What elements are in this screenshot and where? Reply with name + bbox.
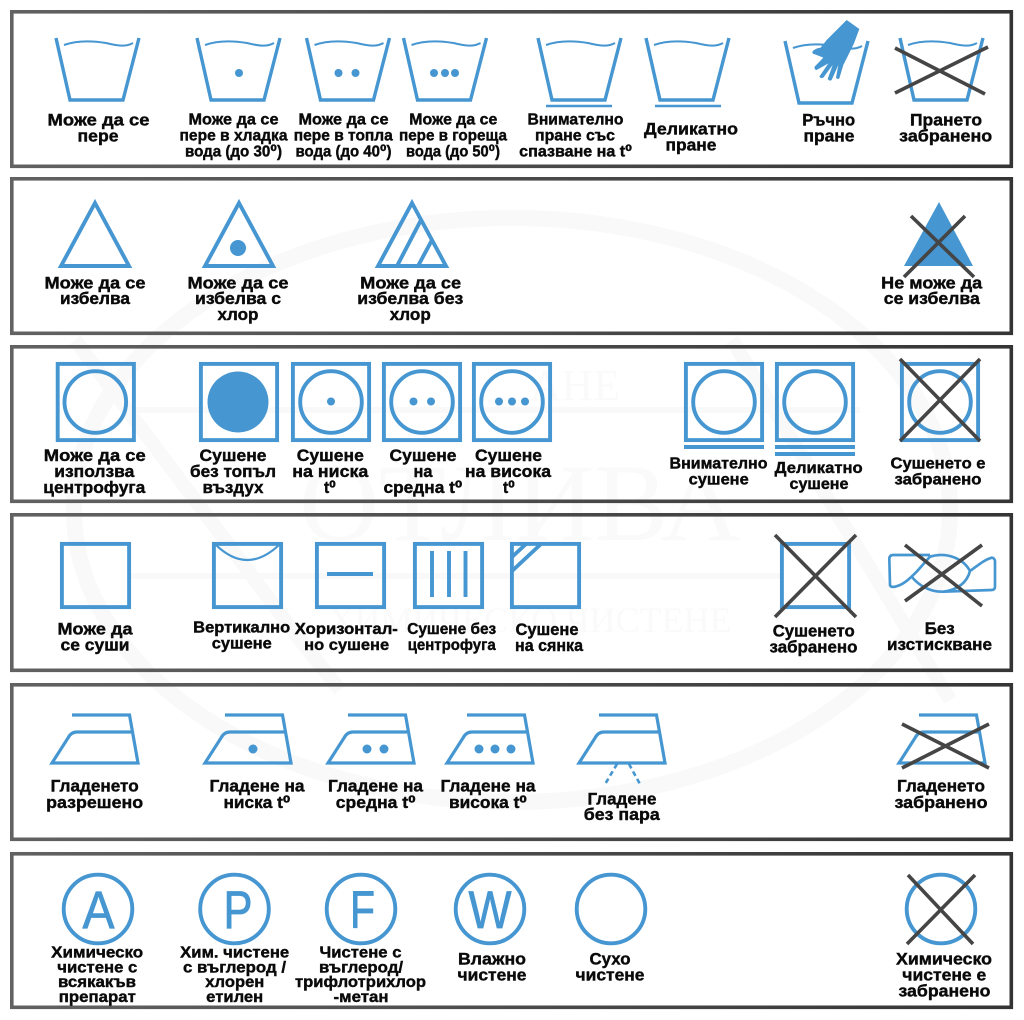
- label: [292, 446, 369, 497]
- label: чистене с: [57, 959, 137, 976]
- label: t⁰: [324, 478, 336, 497]
- label: [775, 460, 863, 493]
- item: wash cold: [180, 38, 288, 160]
- label: Сухо: [590, 949, 630, 968]
- icon: square, circle, one dot: [293, 364, 369, 440]
- label: Влажно: [458, 949, 526, 968]
- label: Може да се: [409, 111, 497, 128]
- label: висока t⁰: [449, 793, 527, 812]
- label: всякакъв: [58, 974, 136, 991]
- item: bleach with chlorine: [188, 203, 288, 324]
- icon: iron: [52, 715, 138, 763]
- label: [890, 455, 986, 488]
- label: [465, 446, 552, 497]
- icon: crossed twisted cloth: [889, 545, 995, 606]
- label: без топъл: [190, 462, 276, 481]
- item: line dry: [193, 544, 290, 652]
- label: [881, 273, 983, 308]
- item: ironing forbidden: [894, 715, 989, 812]
- icon: circle: [577, 875, 645, 943]
- label: въздух: [202, 478, 264, 497]
- item: solvent P: [180, 875, 289, 1006]
- label: [770, 622, 858, 656]
- icon: crossed circle: [907, 875, 975, 944]
- label: забранено: [894, 471, 982, 488]
- icon: circle A: A: [82, 881, 115, 940]
- label: с въглерод /: [183, 959, 287, 976]
- item: hand wash: [785, 20, 868, 145]
- label: трифлотрихлор: [295, 974, 426, 991]
- label: Може да се: [188, 273, 288, 292]
- label: сушене: [790, 476, 849, 493]
- item: low iron: [205, 715, 305, 812]
- label: [584, 789, 660, 824]
- label: Сушене: [390, 446, 456, 465]
- icon: wash tub with bar: [646, 38, 729, 106]
- label: Сушене: [200, 446, 266, 465]
- label: Гладене на: [210, 777, 305, 796]
- item: do not wring: [887, 545, 995, 654]
- label: [515, 620, 584, 655]
- icon: crossed square with circle: [900, 359, 980, 441]
- label: хлорен: [205, 974, 264, 991]
- label: етилен: [206, 989, 263, 1006]
- label: спазване на t⁰: [519, 143, 632, 160]
- label: [670, 455, 768, 488]
- label: [46, 777, 143, 812]
- item: bleach without chlorine: [357, 203, 463, 324]
- item: low temperature: [292, 364, 369, 497]
- item: can be dried: [58, 544, 133, 655]
- watermark: ХИМИЧЕСКО ЧИСТЕНЕ: [329, 600, 731, 640]
- label: пере: [78, 126, 118, 145]
- label: Сушене: [516, 620, 578, 639]
- icon: iron three dots: [447, 715, 533, 763]
- label: избелва с: [195, 289, 281, 308]
- label: [802, 110, 855, 145]
- label: Хим. чистене: [180, 945, 289, 962]
- label: пране: [666, 135, 716, 154]
- icon: wash tub one dot: [197, 38, 280, 100]
- icon: square with filled circle: [201, 364, 277, 440]
- watermark: [74, 218, 950, 802]
- label: [896, 949, 992, 1001]
- icon: square, circle, one bar: [684, 364, 764, 447]
- label: [899, 110, 992, 145]
- label: [193, 620, 290, 652]
- item: drip dry: [407, 544, 496, 654]
- icon: circle F: F: [350, 881, 375, 940]
- label: хлор: [218, 305, 258, 324]
- icon: square with horizontal line: [317, 544, 384, 607]
- label: [295, 621, 398, 654]
- label: на сянка: [515, 636, 584, 655]
- icon: circle W: W: [468, 881, 512, 940]
- label: разрешено: [46, 793, 143, 812]
- label: пере в гореща: [399, 127, 507, 144]
- icon: wash tub: [56, 38, 139, 100]
- label: Гладене на: [440, 777, 536, 796]
- label: [440, 777, 536, 812]
- label: [44, 273, 146, 308]
- panel: washing: [12, 12, 1011, 166]
- label: пране със: [535, 127, 615, 144]
- icon: wash tub with single bar: [538, 38, 621, 106]
- label: Химическо: [51, 945, 143, 962]
- label: центрофуга: [408, 637, 496, 654]
- label: Гладене на: [328, 777, 424, 796]
- label: [894, 777, 988, 812]
- label: [188, 273, 288, 324]
- label: Сушене: [475, 446, 542, 465]
- panel frame: [12, 347, 1011, 501]
- label: Може да се: [360, 273, 461, 292]
- label: чистене е: [902, 966, 986, 985]
- icon: circle P: P: [224, 881, 252, 940]
- label: вода (до 50⁰): [406, 143, 500, 160]
- panel: ironing: [12, 685, 1011, 839]
- panel frame: [12, 515, 1011, 670]
- item: tumble dry ok: [43, 364, 146, 497]
- item: delicate wash: [644, 38, 738, 154]
- panel frame: [12, 12, 1011, 166]
- label: пере в топла: [294, 127, 393, 144]
- label: [328, 777, 424, 812]
- label: на ниска: [292, 462, 369, 481]
- icon: crossed square: [775, 535, 856, 617]
- label: Деликатно: [775, 460, 863, 477]
- label: на: [414, 462, 433, 481]
- icon: crossed wash tub: [895, 38, 988, 100]
- label: [519, 111, 632, 160]
- item: medium temperature: [384, 364, 462, 497]
- icon: iron with crossed steam: [579, 715, 665, 786]
- item: careful wash: [519, 38, 632, 160]
- label: [357, 273, 463, 324]
- label: Сушенето е: [890, 455, 986, 472]
- label: [294, 111, 393, 160]
- item: flat dry: [295, 544, 398, 654]
- label: [190, 446, 276, 497]
- label: [210, 777, 305, 812]
- label: [180, 111, 288, 160]
- label: Без: [925, 619, 955, 638]
- panel frame: [12, 854, 1011, 1007]
- label: Внимателно: [670, 455, 768, 472]
- label: забранено: [894, 793, 988, 812]
- item: do not bleach: [881, 202, 983, 308]
- item: tumble drying forbidden: [890, 359, 986, 488]
- label: средна t⁰: [384, 478, 462, 497]
- item: can be washed: [48, 38, 150, 145]
- panel: drying: [12, 515, 1011, 670]
- label: t⁰: [503, 478, 515, 497]
- label: вода (до 30⁰): [185, 143, 282, 160]
- label: [384, 446, 462, 497]
- label: Може да се: [48, 110, 150, 129]
- label: [48, 110, 150, 145]
- item: wet cleaning: [456, 875, 526, 985]
- label: забранено: [899, 126, 992, 145]
- icon: square with corner stripes: [512, 544, 579, 607]
- icon: square with top arc: [214, 544, 281, 607]
- item: solvent F: [295, 875, 426, 1006]
- label: -метан: [334, 989, 388, 1006]
- icon: triangle: [61, 203, 129, 266]
- label: Може да се: [44, 446, 146, 465]
- label: Не може да: [881, 273, 983, 292]
- label: [180, 945, 289, 1006]
- item: no hot air: [190, 364, 277, 497]
- label: [576, 949, 644, 985]
- item: careful drying: [670, 364, 768, 488]
- item: delicate drying: [775, 364, 863, 493]
- label: забранено: [770, 637, 858, 656]
- label: Гладене: [588, 789, 656, 808]
- label: избелва: [60, 289, 131, 308]
- icon: iron two dots: [328, 715, 414, 763]
- item: wash warm: [294, 38, 393, 160]
- icon: wash tub three dots: [404, 38, 486, 100]
- label: Внимателно: [528, 111, 624, 128]
- label: на висока: [465, 462, 552, 481]
- label: изстискване: [887, 635, 992, 654]
- icon: square, circle, three dots: [474, 364, 550, 440]
- item: dry cleaning forbidden: [896, 875, 992, 1001]
- label: избелва без: [357, 289, 463, 308]
- icon: wash tub two dots: [306, 38, 390, 100]
- label: ниска t⁰: [224, 793, 290, 812]
- item: do not wash: [895, 38, 992, 145]
- item: can be bleached: [44, 203, 146, 308]
- label: [407, 621, 496, 654]
- label: [295, 945, 426, 1006]
- label: Гладенето: [51, 777, 139, 796]
- panel frame: [12, 685, 1011, 839]
- icon: striped triangle: [378, 203, 446, 266]
- label: средна t⁰: [336, 793, 416, 812]
- label: Деликатно: [644, 119, 738, 138]
- label: въглерод/: [319, 959, 404, 976]
- label: чистене: [576, 966, 644, 985]
- label: [887, 619, 992, 654]
- label: чистене: [458, 966, 526, 985]
- label: Сушене: [297, 446, 364, 465]
- item: iron without steam: [579, 715, 665, 824]
- icon: triangle with dot: [205, 203, 273, 266]
- watermark: ОТЛИВА: [299, 442, 741, 564]
- item: ironing allowed: [46, 715, 143, 812]
- label: вода (до 40⁰): [296, 143, 392, 160]
- label: Може да се: [188, 111, 279, 128]
- label: Прането: [910, 110, 982, 129]
- icon: square with circle: [58, 364, 134, 440]
- label: [58, 619, 133, 655]
- label: сушене: [689, 471, 749, 488]
- item: dry in shade: [512, 544, 584, 655]
- label: [399, 111, 507, 160]
- label: се суши: [60, 636, 130, 655]
- item: high iron: [440, 715, 536, 812]
- label: препарат: [59, 989, 136, 1006]
- label: се избелва: [884, 289, 980, 308]
- label: центрофуга: [43, 478, 146, 497]
- label: Хоризонтал-: [295, 621, 398, 638]
- icon: crossed filled triangle: [904, 202, 974, 277]
- label: забранено: [898, 982, 990, 1001]
- item: dry cleaning: [576, 875, 645, 985]
- panel: dry cleaning: [12, 854, 1011, 1007]
- item: any solvent: [51, 875, 143, 1006]
- icon: square, circle, two dots: [384, 364, 460, 440]
- label: използва: [54, 462, 135, 481]
- label: [51, 945, 143, 1006]
- label: Вертикално: [193, 620, 290, 637]
- label: [458, 949, 526, 985]
- label: Ръчно: [802, 110, 855, 129]
- label: без пара: [584, 805, 660, 824]
- item: wash hot: [399, 38, 507, 160]
- watermark: АНЕ: [530, 361, 620, 410]
- label: Сушенето: [773, 622, 855, 641]
- label: хлор: [390, 305, 431, 324]
- label: Химическо: [896, 949, 992, 968]
- panel frame: [12, 179, 1011, 333]
- label: Може да: [58, 619, 133, 638]
- label: пере в хладка: [180, 127, 288, 144]
- icon: crossed iron: [899, 715, 989, 768]
- item: drying forbidden: [770, 535, 858, 656]
- panel: bleaching: [12, 179, 1011, 333]
- label: Може да се: [298, 111, 389, 128]
- item: medium iron: [328, 715, 424, 812]
- icon: iron one dot: [205, 715, 291, 763]
- label: сушене: [212, 635, 272, 652]
- icon: tub with hand: [785, 20, 868, 103]
- label: [644, 119, 738, 154]
- icon: square with three vertical lines: [415, 544, 482, 607]
- label: пране: [804, 126, 854, 145]
- icon: square, circle, two bars: [775, 364, 855, 454]
- label: Гладенето: [897, 777, 985, 796]
- icon: square: [62, 544, 129, 607]
- label: Чистене с: [320, 945, 402, 962]
- label: [43, 446, 146, 497]
- label: Може да се: [44, 273, 146, 292]
- label: Сушене без: [407, 621, 496, 638]
- item: high temperature: [465, 364, 552, 497]
- label: но сушене: [304, 637, 389, 654]
- panel: tumble drying: [12, 347, 1011, 501]
